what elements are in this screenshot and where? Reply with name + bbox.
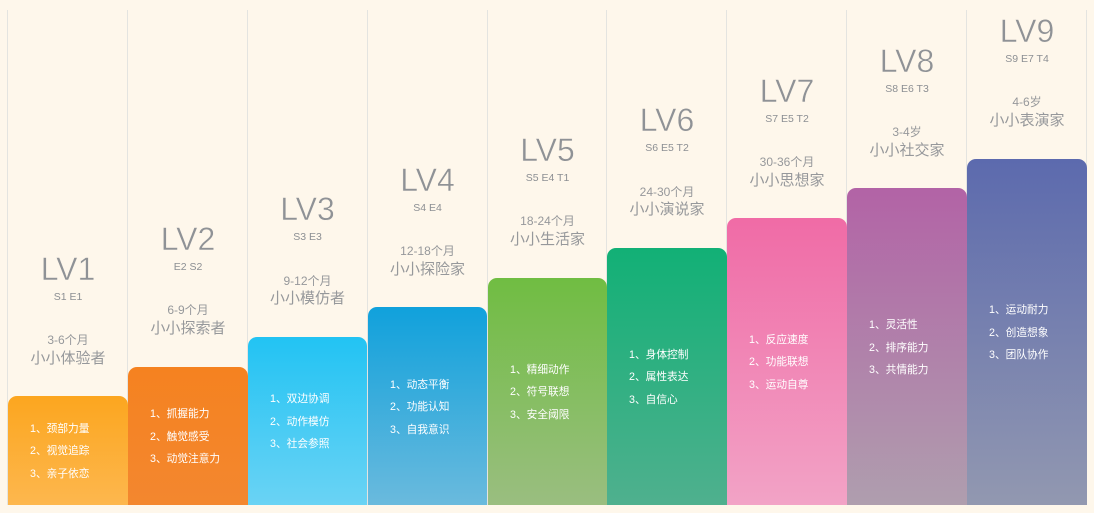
stage name: 小小探索者 [150,320,226,337]
level code: S4 E4 [413,202,442,214]
stage name: 小小社交家 [869,142,944,159]
age range: 3-4岁 [892,125,922,139]
skill 2: 2、创造想象 [989,327,1048,339]
skill 2: 2、功能认知 [390,401,449,413]
bar: LV1 [8,396,128,505]
skill 2: 2、视觉追踪 [30,445,89,457]
stage name: 小小模仿者 [270,290,345,307]
skill 2: 2、触觉感受 [150,431,209,443]
age range: 30-36个月 [760,155,814,169]
skill 1: 1、双边协调 [270,393,329,405]
bar: LV5 [488,278,607,505]
skill 3: 3、自信心 [629,394,678,406]
skill 1: 1、抓握能力 [150,408,209,420]
stage name: 小小表演家 [989,112,1064,129]
stage name: 小小探险家 [390,261,465,278]
stage name: 小小生活家 [510,231,585,248]
age range: 12-18个月 [400,244,455,258]
level code: S6 E5 T2 [645,142,689,154]
column: LV7 [727,73,847,505]
level title LV2: LV2 [161,221,215,257]
skill 2: 2、功能联想 [749,356,808,368]
skill 2: 2、动作模仿 [270,416,329,428]
skill 2: 2、符号联想 [510,386,569,398]
level code: S5 E4 T1 [526,172,569,184]
bar: LV2 [128,367,248,505]
column: LV6 [607,102,727,505]
column: LV4 [368,162,487,505]
level code: E2 S2 [174,261,202,273]
skill 3: 3、自我意识 [390,424,449,436]
column: LV8 [847,43,967,505]
skill 3: 3、社会参照 [270,438,329,450]
stage name: 小小思想家 [749,172,824,189]
age range: 6-9个月 [167,303,209,317]
level code: S8 E6 T3 [885,83,929,95]
age range: 4-6岁 [1012,95,1042,109]
skill 1: 1、反应速度 [749,334,808,346]
column: LV3 [248,191,367,505]
skill 3: 3、亲子依恋 [30,468,89,480]
level code: S3 E3 [293,231,322,243]
bar: LV9 [967,159,1087,505]
age range: 9-12个月 [283,274,332,288]
column: LV5 [488,132,607,505]
stage name: 小小演说家 [629,201,704,218]
bar: LV6 [607,248,727,505]
skill 1: 1、运动耐力 [989,304,1048,316]
level title LV3: LV3 [280,191,335,227]
age range: 18-24个月 [520,214,575,228]
level code: S1 E1 [54,291,82,303]
skill 1: 1、身体控制 [629,349,688,361]
level title LV6: LV6 [640,102,694,138]
column: LV1 [8,251,128,505]
level code: S9 E7 T4 [1005,53,1049,65]
bar: LV8 [847,188,967,505]
skill 3: 3、共情能力 [869,364,928,376]
level title LV9: LV9 [1000,13,1054,49]
bar: LV4 [368,307,487,505]
level title LV4: LV4 [400,162,455,198]
level code: S7 E5 T2 [765,113,809,125]
skill 1: 1、动态平衡 [390,379,449,391]
level title LV7: LV7 [760,73,814,109]
skill 2: 2、属性表达 [629,371,688,383]
age range: 3-6个月 [47,333,89,347]
column: LV9 [967,13,1087,505]
level title LV1: LV1 [41,251,95,287]
skill 3: 3、动觉注意力 [150,453,220,465]
skill 1: 1、精细动作 [510,364,569,376]
column: LV2 [128,221,248,505]
bar: LV7 [727,218,847,505]
level title LV5: LV5 [520,132,575,168]
age range: 24-30个月 [640,185,694,199]
skill 1: 1、灵活性 [869,319,918,331]
skill 3: 3、安全阈限 [510,409,569,421]
stage name: 小小体验者 [30,350,106,367]
skill 2: 2、排序能力 [869,342,928,354]
skill 3: 3、团队协作 [989,349,1048,361]
bar: LV3 [248,337,367,505]
level title LV8: LV8 [880,43,934,79]
skill 1: 1、颈部力量 [30,423,89,435]
skill 3: 3、运动自尊 [749,379,808,391]
